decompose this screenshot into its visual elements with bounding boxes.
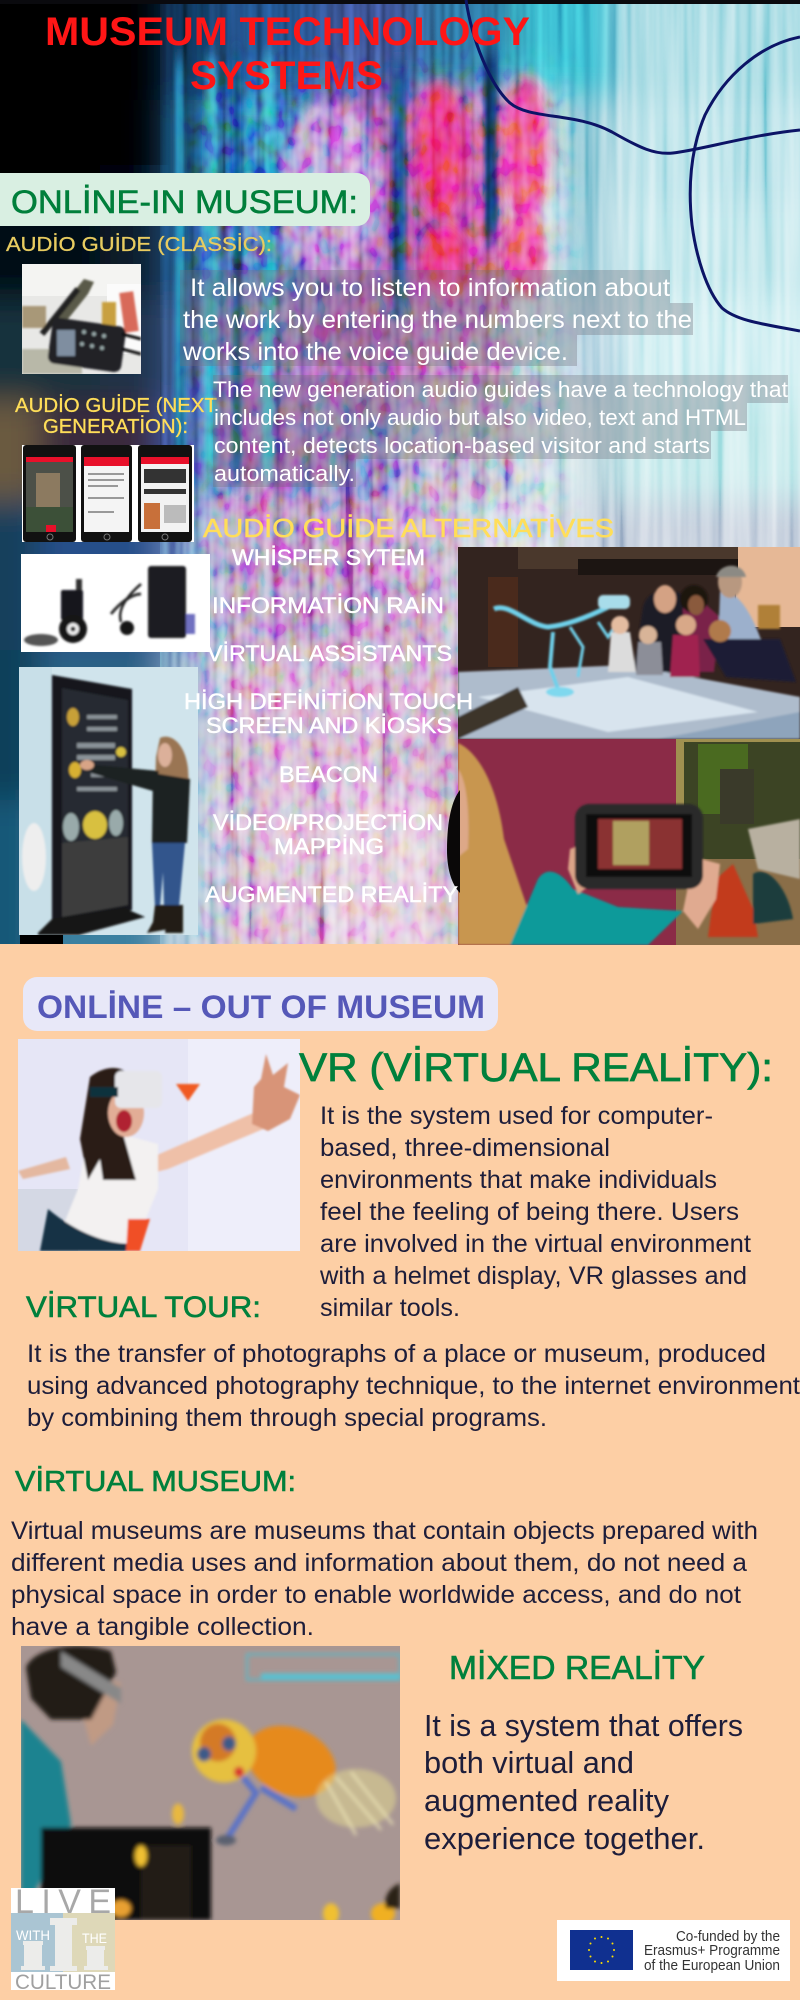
photo: smartphones with audio guide app [22, 445, 194, 542]
text block: virtual museum: physical space in order to enable worldwide access, and do not [11, 1581, 741, 1609]
text block: VR description: similar tools. [320, 1294, 460, 1322]
text block: next generation audio guide: includes not only audio but also video, text and HTML [214, 405, 746, 430]
text block: virtual tour: by combining them through special programs. [27, 1404, 547, 1432]
logo: Erasmus+ co-funded [557, 1920, 790, 1981]
logo: live with the culture: CULTURE [15, 1971, 111, 1994]
list: audio guide alternatives: WHİSPER SYTEM [232, 545, 425, 570]
text block: VR description [319, 1102, 751, 1322]
heading: audio guide alternatives: AUDİO GUİDE ALTERNATİVES [203, 513, 614, 543]
title: SYSTEMS [190, 54, 383, 98]
heading: virtual tour: VİRTUAL TOUR: [26, 1291, 261, 1324]
photo: visitor using augmented reality tablet [458, 739, 800, 945]
section heading: online out of museum [23, 977, 498, 1031]
logo: Erasmus+ co-funded: Erasmus+ Programme [644, 1942, 780, 1959]
pink blobs [280, 76, 553, 300]
text block: mixed reality: experience together. [424, 1821, 705, 1856]
list: audio guide alternatives: HİGH DEFİNİTİON TOUCH [184, 689, 473, 714]
photo: classic audio guide device [22, 264, 141, 374]
list: audio guide alternatives: VİDEO/PROJECTİON [213, 810, 443, 835]
text block: virtual museum: have a tangible collection. [11, 1613, 314, 1641]
heading: VR: VR (VİRTUAL REALİTY): [299, 1045, 773, 1090]
logo: live with the culture: WITH [16, 1927, 50, 1943]
logo: live with the culture: THE [82, 1930, 107, 1946]
text block: classic audio guide: It allows you to listen to information about [190, 274, 670, 302]
text block: next generation audio guide: automatically. [214, 461, 355, 486]
heading: mixed reality: MİXED REALİTY [449, 1649, 705, 1686]
title [45, 10, 530, 98]
photo: woman wearing VR headset [18, 1039, 300, 1251]
list: audio guide alternatives: VİRTUAL ASSİSTANTS [207, 641, 452, 666]
text block: virtual museum [11, 1517, 758, 1641]
text block: virtual museum: different media uses and information about them, do not need a [11, 1549, 747, 1577]
text block: next generation audio guide: content, detects location-based visitor and starts [214, 433, 710, 458]
photo: touch screen kiosk [19, 667, 198, 935]
colour streaks [160, 0, 800, 945]
text block: classic audio guide: works into the voice guide device. [182, 338, 568, 366]
heading: audio guide next generation: AUDİO GUİDE (NEXT [15, 394, 217, 417]
heading: audio guide next generation [15, 394, 217, 438]
decorative curves: navy lines [466, 0, 800, 331]
text block: VR description: feel the feeling of being there. Users [320, 1198, 739, 1226]
heading: audio guide classic: AUDİO GUİDE (CLASSİC): [6, 233, 272, 256]
text block: next generation audio guide [213, 375, 788, 487]
text block: mixed reality: It is a system that offers [424, 1708, 743, 1743]
section heading: online out of museum: ONLİNE – OUT OF MUSEUM [37, 989, 485, 1025]
pixel mosaic noise [170, 0, 590, 945]
text block: VR description: environments that make individuals [320, 1166, 717, 1194]
text block: virtual tour: It is the transfer of photographs of a place or museum, produced [27, 1340, 766, 1368]
text block: VR description: with a helmet display, VR glasses and [319, 1262, 747, 1290]
text block: VR description: It is the system used for computer- [320, 1102, 713, 1130]
logo: Erasmus+ co-funded: Co-funded by the [676, 1928, 780, 1945]
text block: mixed reality: both virtual and [424, 1745, 634, 1780]
photo: whisper system devices [21, 554, 210, 652]
list: audio guide alternatives [184, 545, 473, 907]
section heading: online in museum: ONLİNE-IN MUSEUM: [11, 184, 358, 220]
logo: live with the culture [11, 1883, 115, 1994]
heading: virtual museum: VİRTUAL MUSEUM: [15, 1465, 296, 1498]
text block: VR description: are involved in the virtual environment [320, 1230, 751, 1258]
text block: next generation audio guide: The new generation audio guides have a technology that [213, 377, 788, 402]
text block: virtual museum: Virtual museums are museums that contain objects prepared with [11, 1517, 758, 1545]
logo: live with the culture: LIVE [15, 1883, 111, 1921]
icon: EU flag [570, 1930, 633, 1970]
text block: virtual tour [27, 1340, 800, 1432]
list: audio guide alternatives: INFORMATİON RAİN [212, 593, 444, 618]
vertical blue stripes [175, 50, 498, 480]
photo: dinosaur hologram on interactive table [458, 547, 800, 739]
list: audio guide alternatives: MAPPİNG [274, 834, 384, 859]
photo: mixed reality headset and creature [21, 1646, 400, 1920]
text block: VR description: based, three-dimensional [320, 1134, 610, 1162]
section heading: online in museum [0, 173, 370, 226]
text block: mixed reality [424, 1708, 743, 1856]
list: audio guide alternatives: BEACON [279, 762, 378, 787]
title: MUSEUM TECHNOLOGY [45, 10, 530, 54]
text block: classic audio guide [180, 270, 693, 366]
panel: blurred digital artwork background [0, 0, 800, 1000]
list: audio guide alternatives: SCREEN AND KİOSKS [206, 713, 452, 738]
text block: mixed reality: augmented reality [424, 1783, 669, 1818]
logo: Erasmus+ co-funded: of the European Union [644, 1957, 780, 1974]
text block: virtual tour: using advanced photography technique, to the internet environment [27, 1372, 800, 1400]
text block: classic audio guide: the work by entering the numbers next to the [183, 306, 692, 334]
list: audio guide alternatives: AUGMENTED REALİTY [205, 882, 458, 907]
heading: audio guide next generation: GENERATİON): [43, 415, 188, 438]
shadow beside tablet photo [447, 790, 460, 893]
